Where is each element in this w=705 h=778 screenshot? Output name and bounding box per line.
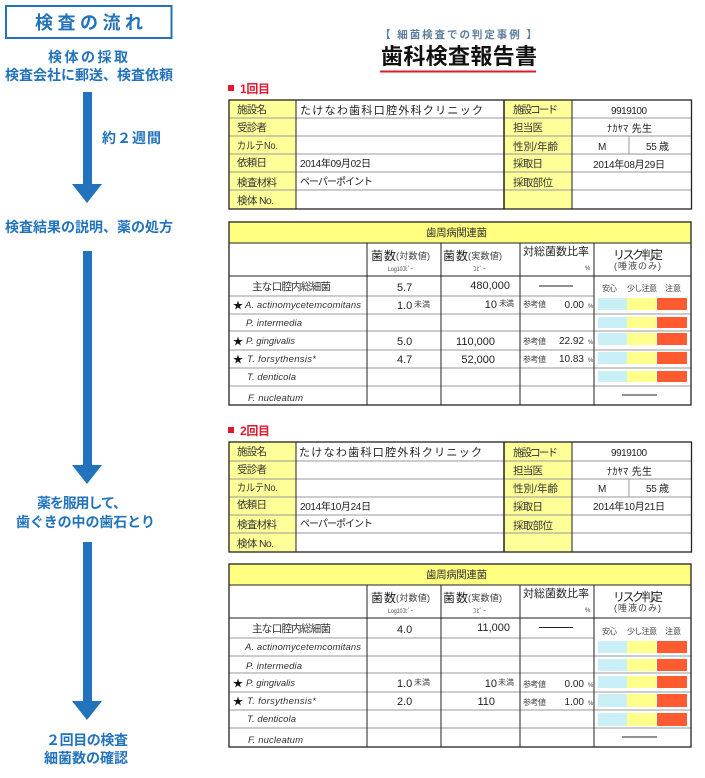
panel: second test info table: 検査材料 — [237, 518, 278, 531]
panel: first test info table: 施設コード — [513, 103, 558, 116]
values: 4.7 — [397, 354, 412, 366]
row labels: 主な口腔内総細菌 — [252, 280, 331, 293]
values — [397, 280, 594, 366]
values: 11,000 — [477, 622, 510, 634]
panel: second test info table: ペーパーポイント — [300, 518, 373, 530]
subtitle: 【 細菌検査での判定事例 】 — [380, 28, 537, 41]
column headings: (実数値) — [468, 592, 502, 603]
panel: first test info table: 性別/年齢 — [513, 140, 558, 153]
row labels: A. actinomycetemcomitans — [244, 300, 361, 311]
column headings: Log10ｺﾋﾟｰ — [388, 266, 413, 273]
step: sample collection — [5, 49, 173, 83]
column headings — [371, 586, 663, 615]
values: 参考値 — [523, 354, 546, 364]
panel: second test info table: たけなわ歯科口腔外科クリニック — [299, 445, 482, 459]
values: 未満 — [499, 298, 514, 308]
values: 110 — [477, 696, 495, 708]
values: 未満 — [414, 299, 430, 309]
values: 参考値 — [523, 299, 546, 309]
arrow: to medication — [72, 251, 102, 484]
column headings: (実数値) — [468, 250, 502, 261]
panel: second test info table: 検体 No. — [237, 537, 274, 550]
values: 52,000 — [461, 354, 495, 366]
risk bars — [598, 641, 687, 738]
row labels: ★ — [233, 697, 243, 708]
panel: first test info table: 2014年08月29日 — [593, 158, 665, 171]
row labels: P. gingivalis — [246, 336, 295, 347]
row labels: P. gingivalis — [246, 678, 295, 689]
row labels: P. intermedia — [246, 661, 302, 672]
panel: second test info table: 55 歳 — [646, 483, 669, 495]
row labels: T. forsythensis* — [247, 696, 316, 707]
column headings: (唾液のみ) — [614, 603, 661, 613]
values: 5.0 — [397, 336, 412, 348]
row labels: T. denticola — [247, 714, 296, 725]
values: 参考値 — [523, 697, 546, 707]
row labels: T. denticola — [247, 372, 296, 383]
values: 10 — [485, 299, 497, 311]
panel: second test info table: 採取日 — [513, 500, 543, 513]
table header band — [229, 222, 691, 243]
panel: second test info table: 受診者 — [237, 463, 267, 476]
panel: first test info table: 依頼日 — [237, 156, 267, 169]
values: 480,000 — [470, 280, 510, 292]
row labels: F. nucleatum — [248, 735, 303, 746]
title underline — [380, 70, 536, 72]
step: second test: 細菌数の確認 — [44, 750, 128, 766]
step: second test — [44, 732, 128, 766]
label: about two weeks: 約２週間 — [102, 130, 161, 146]
row labels: ★ — [233, 337, 243, 348]
column headings: ｺﾋﾟｰ — [473, 266, 486, 273]
column headings — [371, 244, 663, 273]
panel: second test info table: 施設名 — [237, 445, 267, 458]
column headings: Log10ｺﾋﾟｰ — [388, 608, 413, 615]
risk legend — [602, 626, 681, 636]
report title: 歯科検査報告書 — [381, 44, 537, 69]
column headings: 菌数 — [443, 248, 468, 263]
values: 0.00 — [565, 679, 584, 690]
values: 1.0 — [397, 300, 412, 312]
table header band: 歯周病関連菌 — [426, 568, 487, 581]
risk legend: 少し注意 — [627, 626, 657, 636]
values: 4.0 — [397, 624, 412, 636]
panel: first test info table: ペーパーポイント — [300, 176, 373, 188]
values: 1.0 — [397, 678, 412, 690]
arrow: to results — [72, 92, 102, 203]
values: % — [588, 304, 594, 310]
values: 未満 — [498, 677, 514, 687]
values: 1.00 — [565, 697, 584, 708]
table header band — [229, 564, 691, 585]
row labels: P. intermedia — [246, 318, 302, 329]
column headings: (唾液のみ) — [614, 261, 661, 271]
values: 5.7 — [397, 282, 412, 294]
values: 22.92 — [559, 336, 584, 347]
panel: first test info table: 検査材料 — [237, 176, 278, 189]
risk bars — [598, 298, 687, 396]
column headings: (対数値) — [396, 592, 430, 603]
column headings: 菌数 — [443, 590, 468, 605]
panel: first test info table: 施設名 — [237, 103, 267, 116]
row labels: ★ — [233, 301, 243, 312]
values: 参考値 — [523, 679, 546, 689]
values: 未満 — [414, 677, 430, 687]
panel: second test info table: カルテNo. — [237, 482, 278, 494]
panel: first test info table — [229, 100, 692, 209]
risk legend: 少し注意 — [627, 283, 657, 293]
risk legend: 安心 — [602, 283, 617, 293]
column headings: % — [585, 266, 591, 272]
panel: second test info table: 依頼日 — [237, 498, 267, 511]
panel: first test info table: 検体 No. — [237, 194, 274, 207]
row labels: 主な口腔内総細菌 — [252, 622, 331, 635]
panel: second test bacteria table — [229, 564, 691, 747]
panel: second test info table: 施設コード — [513, 446, 558, 459]
panel: second test info table: M — [598, 484, 606, 495]
panel: second test info table: 性別/年齢 — [513, 482, 558, 495]
step: sample collection: 検体の採取 — [48, 49, 128, 65]
column headings: ｺﾋﾟｰ — [473, 608, 486, 615]
column headings: リスク判定 — [613, 248, 663, 262]
flow title box — [6, 6, 172, 38]
values: % — [588, 358, 594, 364]
section label: second test: 2回目 — [240, 424, 270, 438]
column headings: リスク判定 — [613, 590, 663, 604]
row labels: ★ — [233, 355, 243, 366]
flow title box: 検査の流れ — [35, 13, 143, 33]
row labels — [233, 280, 361, 404]
risk legend: 安心 — [602, 626, 617, 636]
panel: first test info table: M — [598, 142, 606, 153]
section label: first test: 1回目 — [240, 82, 270, 96]
panel: first test info table: 2014年09月02日 — [300, 157, 371, 170]
arrow: to second test — [72, 542, 102, 720]
values: 10 — [485, 678, 497, 690]
panel: first test info table: 担当医 — [513, 121, 543, 134]
panel: second test info table: 採取部位 — [513, 519, 554, 532]
panel: first test info table: たけなわ歯科口腔外科クリニック — [300, 103, 483, 117]
values: 110,000 — [456, 336, 495, 348]
panel: first test info table: 採取日 — [513, 157, 543, 170]
panel: first test info table: 55 歳 — [646, 141, 669, 153]
step: medication and scaling: 薬を服用して、 — [37, 495, 127, 511]
column headings: 対総菌数比率 — [523, 244, 589, 258]
panel: second test info table: 2014年10月21日 — [593, 500, 665, 513]
panel: first test info table: 採取部位 — [513, 176, 554, 189]
panel: second test info table: 2014年10月24日 — [300, 500, 371, 513]
panel: first test bacteria table — [229, 222, 691, 405]
values: % — [588, 683, 594, 689]
table header band: 歯周病関連菌 — [426, 226, 487, 239]
row labels: T. forsythensis* — [247, 354, 316, 365]
values: % — [588, 701, 594, 707]
step: medication and scaling — [16, 495, 155, 530]
report heading — [380, 28, 537, 72]
panel: first test info table: カルテNo. — [237, 140, 278, 152]
values: 10.83 — [559, 354, 584, 365]
step: results and prescription: 検査結果の説明、薬の処方 — [5, 219, 173, 235]
step: second test: ２回目の検査 — [46, 732, 128, 748]
panel: first test info table: 受診者 — [237, 121, 267, 134]
values: 2.0 — [397, 696, 412, 708]
panel: second test info table — [229, 442, 692, 552]
values — [397, 622, 594, 708]
row labels — [233, 622, 361, 746]
step: medication and scaling: 歯ぐきの中の歯石とり — [16, 514, 155, 530]
row labels: F. nucleatum — [248, 393, 303, 404]
panel: second test info table: 担当医 — [513, 464, 543, 477]
step: sample collection: 検査会社に郵送、検査依頼 — [5, 67, 173, 83]
row labels: ★ — [233, 679, 243, 690]
column headings: % — [585, 608, 591, 614]
risk legend: 注意 — [665, 283, 681, 293]
panel: second test info table: ﾅｶﾔﾏ 先生 — [607, 465, 652, 478]
panel: first test info table: ﾅｶﾔﾏ 先生 — [607, 122, 652, 135]
left flow column — [5, 6, 173, 766]
row labels: A. actinomycetemcomitans — [244, 642, 361, 653]
risk legend — [602, 283, 681, 293]
risk legend: 注意 — [665, 626, 681, 636]
panel: first test info table: 9919100 — [611, 106, 647, 117]
column headings: 対総菌数比率 — [523, 586, 589, 600]
values: 参考値 — [523, 336, 546, 346]
values: % — [588, 340, 594, 346]
column headings: 菌数 — [371, 590, 396, 605]
values: 0.00 — [565, 300, 584, 311]
panel: second test info table: 9919100 — [611, 448, 647, 459]
column headings: (対数値) — [396, 250, 430, 261]
column headings: 菌数 — [371, 248, 396, 263]
